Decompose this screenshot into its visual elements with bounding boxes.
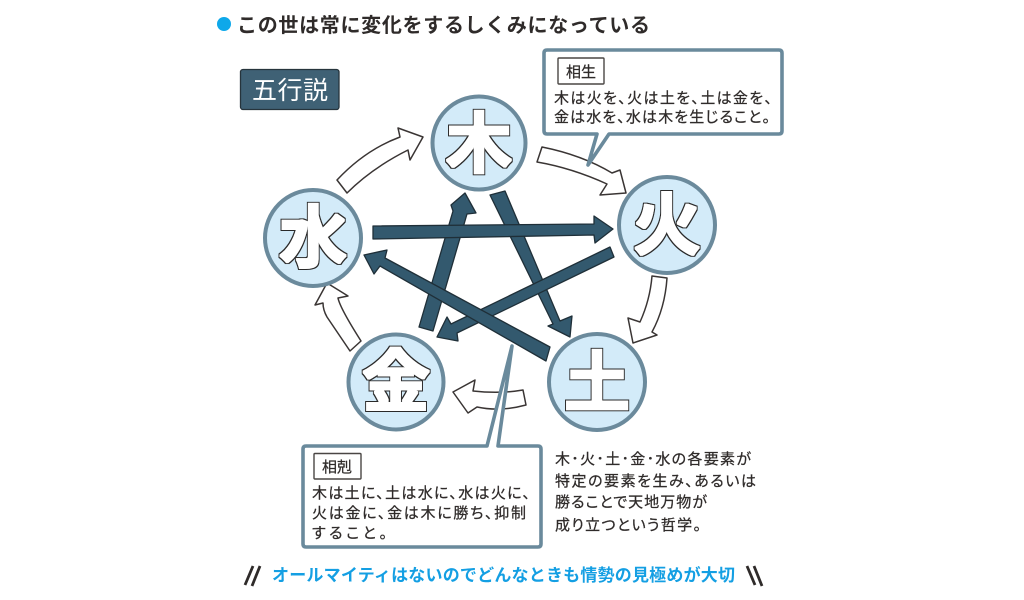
element: 木 bbox=[432, 96, 526, 190]
text: explanation: 勝ることで天地万物が bbox=[555, 494, 707, 511]
callout: 相生: 木は火を、火は土を、土は金を、 bbox=[554, 90, 772, 107]
callout: 相剋: すること。 bbox=[312, 525, 387, 542]
slashes right bbox=[747, 566, 762, 586]
footer message: オールマイティはないのでどんなときも情勢の見極めが大切 bbox=[272, 565, 735, 585]
badge: 五行説 bbox=[240, 70, 339, 110]
callout: 相生 bbox=[544, 50, 782, 165]
callout: 相剋: 相剋 bbox=[322, 459, 352, 476]
element: 火 bbox=[619, 177, 715, 273]
callout: 相生: 相生 bbox=[566, 64, 596, 81]
element: 金: 金 bbox=[362, 345, 430, 421]
callout: 相剋: 火は金に、金は木に勝ち、抑制 bbox=[312, 505, 526, 522]
element: 木: 木 bbox=[446, 107, 512, 181]
element: 土 bbox=[549, 334, 645, 430]
arrow: 水 to 火 bbox=[373, 216, 613, 243]
callout: 相生: 金は水を、水は木を生じること。 bbox=[554, 109, 770, 126]
arrow: 水 to 木 bbox=[337, 128, 423, 193]
arrow: 火 to 土 bbox=[628, 276, 667, 343]
text: explanation: 特定の要素を生み、あるいは bbox=[555, 473, 756, 490]
callout: 相剋 bbox=[303, 346, 541, 547]
arrow: 木 to 火 bbox=[537, 147, 626, 195]
element: 土: 土 bbox=[564, 346, 630, 420]
arrow: 金 to 木 bbox=[419, 193, 476, 331]
badge: 五行説: 五行説 bbox=[252, 77, 328, 105]
text: explanation: 成り立つという哲学。 bbox=[555, 517, 701, 534]
arrows: 相生 cycle bbox=[315, 128, 667, 413]
callout: 相剋: 木は土に、土は水に、水は火に、 bbox=[312, 485, 530, 502]
element: 火: 火 bbox=[633, 188, 701, 264]
arrow: 土 to 金 bbox=[453, 380, 526, 413]
arrow: 金 to 水 bbox=[315, 283, 361, 351]
title: この世は常に変化をするしくみになっている bbox=[237, 14, 650, 37]
arrow: 木 to 土 bbox=[490, 191, 572, 337]
text: explanation bbox=[555, 451, 756, 534]
text: explanation: 木･火･土･金･水の各要素が bbox=[555, 451, 751, 468]
element: 金 bbox=[348, 334, 444, 430]
element: 水: 水 bbox=[279, 201, 347, 277]
element: 水 bbox=[265, 190, 361, 286]
slashes left bbox=[245, 566, 260, 586]
arrows: 相剋 star bbox=[364, 191, 614, 361]
arrow: 土 to 水 bbox=[364, 250, 550, 361]
arrow: 火 to 金 bbox=[437, 247, 614, 341]
